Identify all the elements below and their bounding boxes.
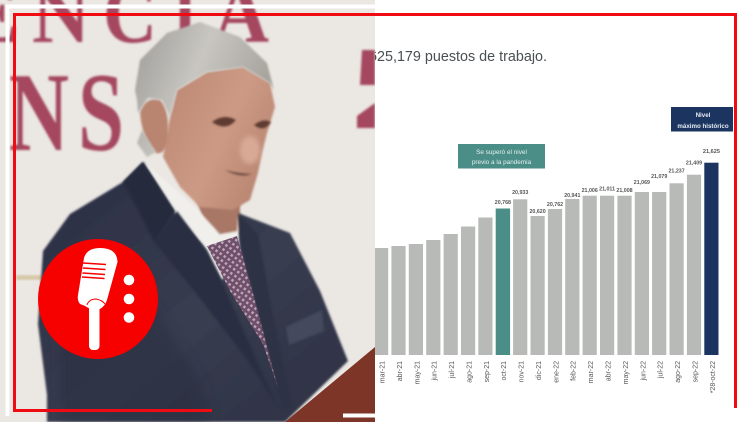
nose highlight	[240, 136, 260, 164]
month labels: jun-22	[640, 361, 647, 381]
wooden lectern	[285, 347, 375, 422]
neck skin	[196, 203, 242, 235]
month labels: *28-oct-22	[710, 361, 717, 393]
value labels: 21,069	[634, 180, 650, 186]
month labels: may-22	[623, 361, 630, 384]
callout: pre-pandemic level: previo a la pandemia	[472, 159, 532, 166]
jacket pocket	[286, 310, 324, 345]
microphone stripes	[82, 263, 106, 278]
month labels: abr-22	[606, 361, 612, 381]
value labels: 20,762	[547, 202, 563, 208]
backdrop lettering	[0, 0, 375, 152]
callout: historic high: máximo histórico	[677, 123, 729, 130]
left lapel	[156, 210, 266, 386]
month labels: mar-22	[588, 361, 595, 383]
month labels: sep-22	[692, 361, 699, 382]
value labels: 21,409	[686, 160, 702, 166]
value labels: 20,933	[512, 190, 528, 196]
photo panel: speaker at press conference	[0, 0, 375, 422]
month labels: ago-21	[466, 361, 474, 383]
eyes and mouth	[212, 117, 271, 175]
value labels: 20,768	[495, 200, 511, 206]
callout: pre-pandemic level	[458, 144, 545, 168]
necktie	[207, 236, 278, 388]
shirt collar	[143, 161, 240, 280]
headline text: 625,179 puestos de trabajo.	[369, 49, 547, 65]
hair	[135, 22, 274, 157]
small white dash	[343, 414, 375, 418]
value labels: 21,079	[651, 174, 667, 180]
face	[163, 67, 275, 210]
callout: historic high	[671, 107, 733, 132]
person	[38, 22, 348, 422]
bars	[374, 163, 718, 355]
callout: historic high: Nivel	[696, 112, 711, 119]
month labels: nov-21	[519, 361, 526, 382]
month labels: oct-21	[501, 361, 508, 380]
microphone head	[78, 248, 118, 309]
right lapel	[236, 212, 278, 386]
month labels: mar-21	[380, 361, 386, 383]
icon: red microphone badge	[38, 239, 158, 359]
month labels: abr-21	[397, 361, 404, 381]
value labels: 21,006	[582, 188, 598, 194]
bar chart: jobs by month	[374, 149, 720, 393]
month labels: jun-21	[432, 361, 439, 381]
month labels: ago-22	[675, 361, 682, 383]
microphone stem	[89, 303, 100, 350]
three dots	[124, 275, 134, 323]
backdrop lettering: N	[9, 51, 69, 175]
suit jacket	[38, 162, 348, 422]
value labels: 21,008	[616, 188, 633, 194]
value labels	[495, 149, 720, 215]
ear	[140, 99, 168, 153]
photo backdrop	[0, 0, 375, 422]
month labels: feb-22	[571, 361, 578, 381]
backdrop lettering: S	[78, 51, 124, 175]
month labels: may-21	[414, 361, 421, 384]
value labels: 21,237	[668, 168, 685, 174]
month labels	[380, 361, 717, 393]
white frame line	[8, 6, 375, 416]
value labels: 21,625	[703, 149, 720, 155]
tan strip on backdrop	[16, 275, 42, 280]
microphone neck arc	[87, 299, 105, 305]
month labels: jul-21	[449, 361, 456, 379]
month labels: jul-22	[658, 361, 665, 379]
jacket lower shadow	[58, 323, 210, 422]
value labels: 20,941	[564, 193, 580, 199]
month labels: sep-21	[484, 361, 491, 382]
month labels: ene-22	[553, 361, 560, 383]
value labels: 21,011	[599, 186, 615, 192]
collar upper jacket	[123, 162, 175, 243]
value labels: 20,620	[529, 209, 546, 215]
callout: pre-pandemic level: Se superó el nivel	[476, 149, 527, 156]
month labels: dic-21	[536, 361, 543, 380]
